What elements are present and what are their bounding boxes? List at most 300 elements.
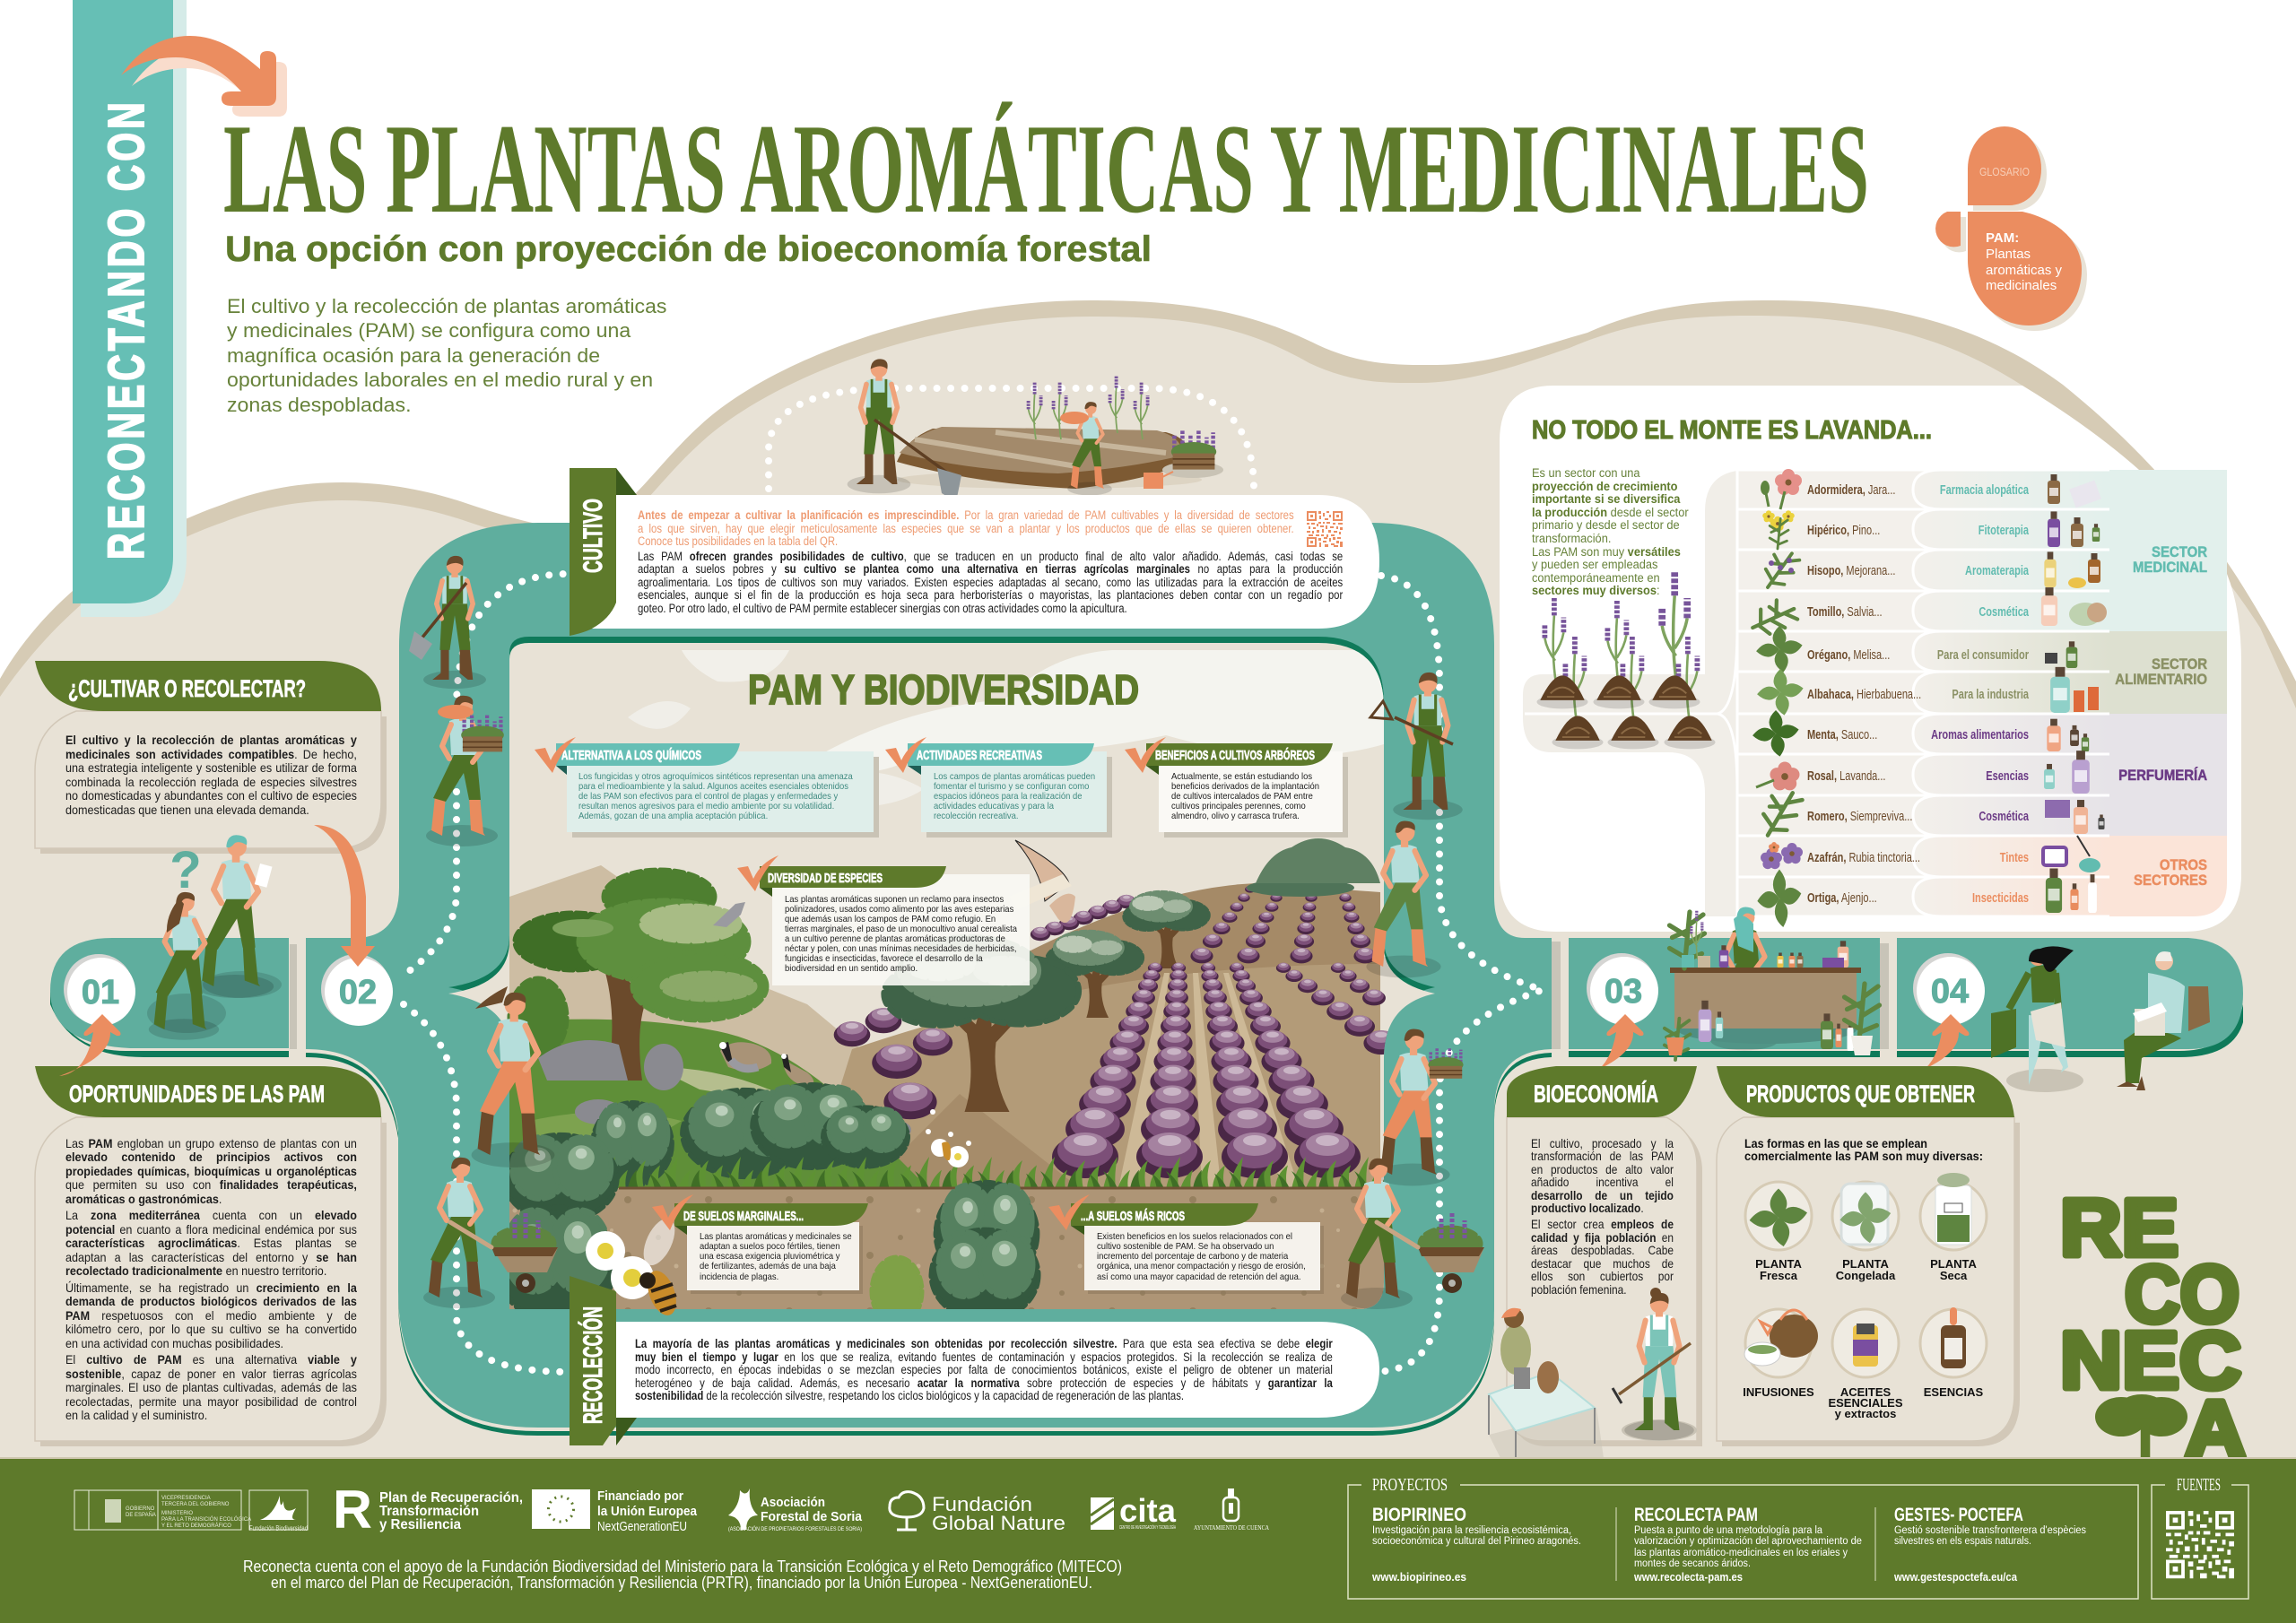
figure: woman standing, right	[1366, 821, 1441, 977]
text: alternativa a los químicos: Los fungicidas y otros agroquímicos sintéticos representan una amenaza	[578, 771, 852, 782]
glossary blobs: Plantas	[1986, 247, 2031, 262]
logo: reconecta: NEC	[2060, 1316, 2241, 1406]
card header: actividades recreativas	[885, 737, 1112, 838]
funding statement: Reconecta cuenta con el apoyo de la Fundación Biodiversidad del Ministerio para la Transición Ecológica y el Reto Demográfico (MITECO)	[243, 1558, 1122, 1575]
text: oportunidades de las PAM: marginales. El uso de plantas cultivadas, además de las	[65, 1380, 357, 1394]
text: oportunidades de las PAM: en una actividad con muchas posibilidades.	[65, 1336, 283, 1350]
text: alternativa a los químicos	[578, 771, 853, 821]
card header: diversidad de especies: DIVERSIDAD DE ESPECIES	[768, 871, 883, 886]
text: de suelos marginales	[700, 1230, 852, 1282]
text: no todo el monte intro: sectores muy diversos:	[1532, 584, 1660, 597]
arrow: to step 02	[314, 825, 375, 967]
card header: de suelos marginales	[652, 1194, 868, 1294]
text: cultivar o recolectar	[65, 733, 357, 817]
text: no todo el monte intro: Es un sector con una	[1532, 466, 1639, 480]
text: de suelos marginales: una escasa exigencia pluviométrica y	[700, 1251, 840, 1262]
project: recolecta pam: www.recolecta-pam.es	[1633, 1570, 1743, 1584]
panel: oportunidades de las PAM: OPORTUNIDADES DE LAS PAM	[69, 1081, 325, 1107]
step 04 marker	[1913, 953, 1985, 1025]
text: de suelos marginales: de fertilizantes, además de una baja	[700, 1261, 836, 1271]
text: actividades recreativas: recolección recreativa.	[934, 811, 1019, 821]
logo: gobierno de españa	[74, 1490, 251, 1530]
text: cultivo orange note: Antes de empezar a cultivar la planificación es imprescindible. Por la gran variedad de PAM cultivables y la diversidad de sectores	[638, 508, 1293, 522]
project: recolecta pam: Puesta a punto de una metodología para la	[1634, 1525, 1823, 1536]
products intro line 2: comercialmente las PAM son muy diversas:	[1744, 1149, 1983, 1163]
card header: alternativa a los químicos	[535, 737, 879, 838]
step 02 marker: 02	[339, 974, 377, 1011]
text: a suelos más ricos	[1097, 1230, 1306, 1282]
text: de suelos marginales: Las plantas aromáticas y medicinales se	[700, 1230, 852, 1241]
project: recolecta pam: montes de secanos áridos.	[1634, 1558, 1751, 1569]
text: recolección body: sostenibilidad de la recolección silvestre, respetando los ciclos biológicos y la capacidad de regeneración de las plantas.	[635, 1389, 1184, 1402]
product: infusiones: INFUSIONES	[1743, 1385, 1814, 1399]
arrow: to step 04	[1908, 1014, 1970, 1076]
figures on the route	[409, 556, 1484, 1309]
species names: Adormidera, Jara...	[1807, 482, 1895, 497]
funding statement: en el marco del Plan de Recuperación, Transformación y Resiliencia (PRTR), financiado por la Unión Europea - NextGenerationEU.	[271, 1574, 1092, 1592]
sector labels: PERFUMERÍA	[2118, 766, 2207, 784]
heading: no todo el monte: NO TODO EL MONTE ES LAVANDA...	[1532, 416, 1932, 445]
heading: PAM y biodiversidad: PAM Y BIODIVERSIDAD	[748, 666, 1139, 713]
project: biopirineo: BIOPIRINEO	[1372, 1505, 1466, 1525]
footer	[0, 1457, 2296, 1623]
text: actividades recreativas: actividades educativas y para la	[934, 801, 1054, 812]
step band 04	[1897, 938, 2243, 1057]
logo: fundación biodiversidad: Fundación Biodiversidad	[249, 1524, 308, 1532]
text: de suelos marginales: incidencia de plagas.	[700, 1271, 778, 1282]
step 03 marker: 03	[1605, 973, 1642, 1011]
logo: gobierno de españa: VICEPRESIDENCIA	[161, 1496, 211, 1501]
text: bioeconomía: productivo localizado.	[1531, 1201, 1644, 1215]
logo: unión europea: NextGenerationEU	[597, 1519, 687, 1534]
products intro: Las formas en las que se emplean	[1744, 1136, 1927, 1150]
text: alternativa a los químicos: para el medioambiente y la salud. Algunos aceites esenciales obtenidos	[578, 781, 848, 792]
arrow: to step 01	[59, 1014, 120, 1076]
use labels: Insecticidas	[1972, 890, 2029, 905]
text: a suelos más ricos: incremento del porcentaje de carbono y de materia	[1097, 1251, 1288, 1262]
project: gestes poctefa	[1893, 1505, 2086, 1584]
text: recolección body: modo incorrecto, en épocas indebidas o se mezclan especies por falta de conocimientos botánicos, existe el peligro de obtener un material	[635, 1363, 1332, 1376]
text: cultivar o recolectar: El cultivo y la recolección de plantas aromáticas y	[65, 733, 357, 747]
product: aceites esenciales: y extractos	[1835, 1407, 1896, 1420]
box: proyectos	[1348, 1475, 2138, 1599]
logo: asociación forestal de soria: Forestal de Soria	[761, 1509, 863, 1524]
figure: shopper woman	[1991, 946, 2083, 1092]
text: diversidad de especies: polinizadores, usados como alimento por las aves esteparias	[785, 904, 1013, 915]
step 04 marker: 04	[1931, 973, 1969, 1011]
species names: Orégano, Melisa...	[1807, 647, 1890, 662]
product icons	[2041, 474, 2107, 913]
panel: oportunidades de las PAM	[35, 1066, 387, 1446]
text: bioeconomía: en productos de alto valor	[1531, 1162, 1674, 1176]
text: cultivo orange note	[638, 508, 1293, 548]
text: cultivo body: goteo. Por otro lado, el cultivo de PAM permite establecer sinergias con otras actividades como la apicultura.	[638, 602, 1126, 615]
logo: cita: CENTRO DE INVESTIGACIÓN Y TECNOLOGÍA	[1119, 1524, 1176, 1531]
product: aceites esenciales	[1828, 1309, 1903, 1420]
figure: woman with crate, right	[1375, 1029, 1464, 1185]
text: no todo el monte intro	[1532, 466, 1689, 597]
text: cultivo orange note: a los que sirven, hay que elegir meticulosamente las especies que se van a plantar y los productos que de ellas se quieren obtener.	[638, 522, 1293, 535]
logo: gobierno de españa: Y EL RETO DEMOGRÁFICO	[161, 1523, 231, 1529]
text: beneficios a cultivos arbóreos	[1171, 771, 1319, 821]
lavender bed	[1537, 570, 1715, 749]
intro paragraph: zonas despobladas.	[227, 394, 411, 416]
step band 03	[1552, 938, 1889, 1057]
card header: diversidad de especies	[737, 855, 1030, 985]
text: beneficios a cultivos arbóreos: beneficios derivados de la implantación	[1171, 781, 1319, 792]
text: oportunidades de las PAM: elevado contenido de principios activos con	[65, 1150, 357, 1164]
project: gestes poctefa: Gestió sostenible transfronterera d'espècies	[1894, 1525, 2086, 1536]
text: a suelos más ricos: cultivo sostenible de PAM. Se ha observado un	[1097, 1241, 1274, 1252]
sector labels: OTROS	[2160, 857, 2207, 873]
text: no todo el monte intro: proyección de crecimiento	[1532, 480, 1678, 493]
icon: falcon	[1009, 840, 1075, 923]
logo: unión europea: Financiado por	[597, 1488, 683, 1504]
figure: couple near step 01: ?	[170, 841, 202, 899]
project: gestes poctefa: www.gestespoctefa.eu/ca	[1893, 1570, 2018, 1584]
text: oportunidades de las PAM: sostenible, capaz de poner en valor tierras agrícolas	[65, 1367, 357, 1381]
glossary blobs: PAM:	[1986, 230, 2019, 246]
logo: asociación forestal de soria: (ASOCIACIÓN DE PROPIETARIOS FORESTALES DE SORIA)	[728, 1526, 862, 1532]
arrow: into title	[121, 36, 287, 117]
text: no todo el monte intro: y pueden ser empleadas	[1532, 558, 1657, 571]
project: biopirineo: Investigación para la resiliencia ecosistémica,	[1372, 1525, 1571, 1536]
text: oportunidades de las PAM: adaptan a las características del entorno y se han	[65, 1250, 357, 1264]
step 02 marker	[321, 954, 393, 1026]
box: fuentes: FUENTES	[2177, 1475, 2221, 1495]
text: oportunidades de las PAM: potencial en cuanto a flora medicinal endémica por sus	[65, 1221, 357, 1236]
diagram: trunk from lavender to species	[1523, 470, 1758, 916]
panel: productos que obtener	[1717, 1066, 2020, 1446]
product: planta seca	[1920, 1173, 1987, 1282]
text: bioeconomía	[1531, 1135, 1674, 1297]
card header: alternativa a los químicos: ALTERNATIVA A LOS QUÍMICOS	[561, 748, 701, 763]
logo: asociación forestal de soria: Asociación	[761, 1495, 825, 1510]
product: infusiones	[1743, 1309, 1818, 1399]
text: recolección body: heterogéneo y de baja calidad. Además, es necesario acatar la normativa sobre protección de especies y de hábitats y garantizar la	[635, 1376, 1332, 1390]
logo: cita: cita	[1119, 1492, 1177, 1529]
logo: reconecta: RE	[2060, 1184, 2179, 1273]
sector labels: SECTOR	[2152, 544, 2207, 560]
product: planta congelada: PLANTA	[1842, 1257, 1889, 1271]
teal route band	[306, 523, 1552, 1436]
text: actividades recreativas: espacios idóneos para la realización de	[934, 791, 1082, 802]
use labels: Para el consumidor	[1937, 647, 2029, 662]
use labels: Esencias	[1986, 768, 2029, 783]
text: cultivo body: adaptan a suelos pobres y su cultivo se plantea como una alternativa en tierras agrícolas marginales no aptas para la producción	[638, 562, 1343, 576]
text: oportunidades de las PAM: demanda de productos biológicos derivados de las	[65, 1294, 357, 1308]
text: diversidad de especies: Las plantas aromáticas suponen un reclamo para insectos	[785, 893, 1004, 904]
text: oportunidades de las PAM: en la calidad y el suministro.	[65, 1408, 207, 1422]
card header: beneficios a cultivos arbóreos: BENEFICIOS A CULTIVOS ARBÓREOS	[1155, 747, 1315, 763]
text: oportunidades de las PAM: recolectado tradicionalmente en nuestro territorio.	[65, 1263, 326, 1278]
panel: recolección text box	[592, 1322, 1379, 1418]
sector labels: ALIMENTARIO	[2115, 672, 2207, 688]
intro paragraph: oportunidades laborales en el medio rural y en	[227, 369, 653, 391]
text: oportunidades de las PAM: La zona mediterránea cuenta con un elevado	[65, 1208, 357, 1222]
text: recolección body: muy bien el tiempo y lugar en los que se realiza, evitando fuentes de contaminación y espacios protegidos. Si la recolección se realiza de	[635, 1350, 1332, 1363]
box: proyectos: PROYECTOS	[1372, 1475, 1448, 1495]
text: a suelos más ricos: así como una mayor capacidad de retención del agua.	[1097, 1271, 1300, 1282]
box: fuentes	[2152, 1475, 2248, 1599]
logo: unión europea	[532, 1488, 698, 1534]
panel: no todo el monte es lavanda	[1500, 386, 2241, 932]
logo: plan de recuperación: Transformación	[379, 1504, 479, 1519]
figure: woman with hoe	[1613, 1288, 1697, 1441]
logo: reconecta	[2060, 1184, 2246, 1475]
sector backgrounds	[2054, 470, 2227, 916]
product: planta congelada	[1832, 1182, 1899, 1282]
text: cultivo body	[638, 549, 1344, 615]
text: no todo el monte intro: contemporáneamente en	[1532, 571, 1660, 585]
figure: man with shovel, left	[409, 556, 486, 689]
text: a suelos más ricos: Existen beneficios en los suelos relacionados con el	[1097, 1230, 1292, 1241]
logo: fundación global nature: Fundación	[932, 1493, 1032, 1515]
use labels: Cosmética	[1979, 808, 2030, 823]
text: cultivo orange note: Conoce tus posibilidades en la tabla del QR.	[638, 534, 838, 548]
text: diversidad de especies: néctar y polen, con unas mínimas necesidades de herbicidas,	[785, 943, 1016, 954]
text: actividades recreativas: fomentar el turismo y se configuran como	[934, 781, 1089, 792]
logo: gobierno de españa: PARA LA TRANSICIÓN ECOLÓGICA	[161, 1516, 251, 1523]
logo: plan de recuperación: R	[333, 1480, 372, 1540]
icon: daisies and bee	[586, 1214, 682, 1319]
step band 01	[50, 938, 297, 1057]
funding statement	[243, 1558, 1122, 1592]
product: planta seca: PLANTA	[1930, 1257, 1977, 1271]
figure: woman carrying crate, left	[426, 696, 504, 846]
panel: bioeconomía: BIOECONOMÍA	[1534, 1080, 1658, 1107]
text: beneficios a cultivos arbóreos: almendro, olivo y carrasca trufera.	[1171, 811, 1300, 821]
glossary blobs	[1935, 126, 2087, 331]
logo: fundación global nature	[890, 1492, 1065, 1534]
subtitle: Una opción con proyección de bioeconomía forestal	[225, 230, 1152, 269]
text: no todo el monte intro: importante si se diversifica	[1532, 492, 1680, 506]
logo: unión europea: la Unión Europea	[597, 1504, 698, 1519]
glossary blobs: aromáticas y	[1986, 263, 2063, 278]
side banner: reconectando con: RECONECTANDO CON	[97, 102, 155, 560]
species names: Romero, Siempreviva...	[1807, 808, 1912, 823]
project: recolecta pam	[1633, 1505, 1862, 1584]
text: oportunidades de las PAM: Últimamente, se ha registrado un crecimiento en la	[65, 1280, 357, 1295]
text: cultivar o recolectar: domesticadas que tienen una elevada demanda.	[65, 802, 309, 816]
top scene: field preparation	[848, 359, 1223, 502]
product: planta seca: Seca	[1940, 1269, 1968, 1282]
logo: fundación global nature: Global Nature	[932, 1512, 1065, 1534]
ribbon: cultivo: CULTIVO	[578, 499, 608, 573]
dotted routes	[403, 388, 1543, 1372]
shop counter scene	[1665, 907, 1880, 1060]
text: oportunidades de las PAM: PAM respetuosos con el medio ambiente y de	[65, 1307, 357, 1322]
side banner: reconectando con	[73, 0, 187, 617]
species names: Azafrán, Rubia tinctoria...	[1807, 849, 1920, 864]
logo: gobierno de españa: MINISTERIO	[161, 1511, 193, 1516]
text: actividades recreativas: Los campos de plantas aromáticas pueden	[934, 771, 1095, 782]
text: recolección body: La mayoría de las plantas aromáticas y medicinales son obtenidas por recolección silvestre. Para que esta sea efectiva se debe elegir	[635, 1337, 1332, 1350]
logo: plan de recuperación: Plan de Recuperación,	[379, 1490, 523, 1506]
biodiversity illustration	[497, 650, 1399, 1325]
product: esencias: ESENCIAS	[1924, 1385, 1984, 1399]
text: oportunidades de las PAM: que permiten su uso con finalidades terapéuticas,	[65, 1177, 357, 1192]
text: bioeconomía: calidad y fija población en	[1531, 1230, 1674, 1245]
card header: de suelos marginales: DE SUELOS MARGINALES...	[683, 1209, 804, 1224]
logo: reconecta: T	[2127, 1405, 2163, 1471]
use rows	[1913, 470, 2109, 916]
panel: cultivar o recolectar	[35, 661, 387, 854]
intro paragraph: El cultivo y la recolección de plantas aromáticas	[227, 295, 666, 317]
project: recolecta pam: las plantas aromático-medicinales en los eriales y	[1634, 1548, 1848, 1558]
species icons	[1747, 469, 1805, 929]
use labels	[1931, 482, 2030, 905]
product: planta congelada: Congelada	[1836, 1269, 1896, 1282]
species names: Menta, Sauco...	[1807, 726, 1877, 742]
text: beneficios a cultivos arbóreos: de cultivos intercalados de PAM entre	[1171, 791, 1313, 802]
logo: cita	[1091, 1492, 1177, 1531]
panel: bioeconomía	[1507, 1066, 1702, 1446]
species rows	[1737, 470, 2006, 916]
figure: man with shovel and phone, right	[1370, 673, 1463, 820]
card header: a suelos más ricos: ...A SUELOS MÁS RICOS	[1081, 1209, 1185, 1224]
figure: woman at distillation table	[1489, 1308, 1605, 1471]
text: bioeconomía: áreas despobladas. Cabe	[1531, 1243, 1674, 1257]
text: bioeconomía: ellos son cubiertos por	[1531, 1269, 1674, 1283]
text: bioeconomía: El cultivo, procesado y la	[1531, 1135, 1674, 1150]
product: planta fresca: PLANTA	[1755, 1257, 1802, 1271]
text: oportunidades de las PAM: recolectadas, permite una mayor posibilidad de control	[65, 1393, 357, 1408]
text: diversidad de especies: que además usan los campos de PAM como refugio. En	[785, 914, 996, 924]
project: recolecta pam: RECOLECTA PAM	[1634, 1505, 1758, 1525]
logo: plan de recuperación	[333, 1480, 523, 1540]
species names: Rosal, Lavanda...	[1807, 768, 1885, 783]
sector labels	[2115, 544, 2207, 889]
text: beneficios a cultivos arbóreos: cultivos principales perennes, como	[1171, 801, 1306, 812]
logo: gobierno de españa: GOBIERNO	[126, 1506, 155, 1512]
card header: actividades recreativas: ACTIVIDADES RECREATIVAS	[917, 748, 1042, 763]
use labels: Fitoterapia	[1979, 522, 2030, 537]
use labels: Farmacia alopática	[1940, 482, 2030, 497]
arrow: to step 03	[1582, 1014, 1643, 1076]
text: a suelos más ricos: orgánica, una menor compactación y riesgo de erosión,	[1097, 1261, 1306, 1271]
product: planta fresca: Fresca	[1760, 1269, 1798, 1282]
text: actividades recreativas	[934, 771, 1095, 821]
product: aceites esenciales: ACEITES	[1840, 1385, 1891, 1399]
sector labels: MEDICINAL	[2133, 560, 2207, 576]
intro paragraph: y medicinales (PAM) se configura como una	[227, 319, 631, 342]
QR code: cultivo	[1307, 511, 1343, 547]
logo: gobierno de españa: TERCERA DEL GOBIERNO	[161, 1502, 230, 1507]
logo: ayuntamiento de cuenca	[1194, 1488, 1269, 1532]
glossary blobs: medicinales	[1986, 278, 2057, 293]
text: no todo el monte intro: Las PAM son muy versátiles	[1532, 545, 1681, 559]
text: diversidad de especies	[785, 893, 1017, 974]
text: diversidad de especies: biodiversidad en un sentido amplio.	[785, 963, 918, 974]
step 01 marker: 01	[82, 974, 119, 1011]
text: bioeconomía: desarrollo de un tejido	[1531, 1188, 1674, 1202]
logo: gobierno de españa: DE ESPAÑA	[126, 1512, 156, 1518]
text: oportunidades de las PAM: propiedades químicas, bioquímicas u organolépticas	[65, 1164, 357, 1178]
ribbon: cultivo	[570, 468, 637, 636]
figure: man with wheelbarrow, left	[423, 1158, 558, 1308]
text: cultivo body: agroalimentaria. Los tipos de cultivos son muy variados. Existen especies adaptadas al secano, como las utilizadas para la extracción de aceites	[638, 576, 1343, 589]
text: no todo el monte intro: la producción desde el sector	[1532, 506, 1689, 519]
product: planta fresca	[1745, 1182, 1812, 1282]
logo: asociación forestal de soria	[728, 1488, 863, 1532]
card header: a suelos más ricos	[1048, 1194, 1324, 1294]
text: cultivo body: esenciales, aunque si el fin de la producción es hoja seca para herboristerías o mayoristas, las plantaciones deben contar con un regadío por	[638, 588, 1343, 602]
project: biopirineo	[1371, 1505, 1581, 1584]
ribbon: recolección: RECOLECCIÓN	[578, 1306, 608, 1424]
step 01 marker	[64, 954, 135, 1026]
text: bioeconomía: población femenina.	[1531, 1282, 1627, 1297]
product: esencias	[1920, 1307, 1987, 1399]
text: diversidad de especies: fungicidas e insecticidas, favorece el desarrollo de la	[785, 953, 983, 964]
project: gestes poctefa: GESTES- POCTEFA	[1894, 1505, 2023, 1525]
panel: productos que obtener: PRODUCTOS QUE OBTENER	[1746, 1081, 1975, 1107]
text: bioeconomía: transformación de las PAM	[1531, 1149, 1674, 1163]
text: cultivar o recolectar: no domesticadas y abundantes con el cultivo de especies	[65, 788, 357, 803]
use labels: Aromas alimentarios	[1931, 726, 2029, 742]
species names: Tomillo, Salvia...	[1807, 603, 1883, 619]
text: oportunidades de las PAM	[65, 1135, 357, 1422]
figure: seated man with box	[2117, 951, 2210, 1090]
species names: Albahaca, Hierbabuena...	[1807, 686, 1921, 701]
text: oportunidades de las PAM: El cultivo de PAM es una alternativa viable y	[65, 1352, 357, 1367]
panel: cultivo text box	[592, 495, 1379, 629]
step 03 marker	[1587, 953, 1658, 1025]
text: bioeconomía: destacar que muchos de	[1531, 1256, 1674, 1271]
glossary blobs: GLOSARIO	[1979, 165, 2030, 178]
species names: Hipérico, Pino...	[1807, 522, 1880, 537]
text: diversidad de especies: a un cultivo perenne de plantas aromáticas productoras de	[785, 933, 1005, 944]
sector labels: SECTOR	[2152, 656, 2207, 673]
use labels: Para la industria	[1952, 686, 2030, 701]
text: alternativa a los químicos: Además, gozan de una amplia aceptación pública.	[578, 811, 768, 821]
intro paragraph	[227, 295, 666, 416]
logo: plan de recuperación: y Resiliencia	[379, 1517, 461, 1532]
text: de suelos marginales: adaptan a suelos poco fértiles, tienen	[700, 1241, 840, 1252]
product: aceites esenciales: ESENCIALES	[1828, 1396, 1903, 1410]
panel: cultivar o recolectar: ¿CULTIVAR O RECOLECTAR?	[68, 675, 306, 702]
project: recolecta pam: valorización y optimización del aprovechamiento de	[1634, 1536, 1862, 1547]
species names: Hisopo, Mejorana...	[1807, 562, 1895, 577]
logo: ayuntamiento de cuenca: AYUNTAMIENTO DE CUENCA	[1194, 1524, 1269, 1532]
project: gestes poctefa: silvestres en els espais naturals.	[1894, 1536, 2031, 1547]
text: bioeconomía: El sector crea empleos de	[1531, 1217, 1674, 1231]
text: no todo el monte intro: primario y desde el sector de	[1532, 518, 1680, 532]
text: diversidad de especies: tierras marginales, el paso de un monocultivo anual cerealista	[785, 924, 1017, 934]
text: beneficios a cultivos arbóreos: Actualmente, se están estudiando los	[1171, 771, 1312, 782]
figure: man with wheelbarrow, right	[1341, 1159, 1484, 1309]
logo: reconecta: CO	[2125, 1250, 2239, 1340]
use labels: Tintes	[2000, 849, 2029, 864]
figure: couple near step 01	[147, 835, 282, 1040]
panel: PAM y biodiversidad	[448, 637, 1435, 1325]
logo: fundación biodiversidad	[249, 1490, 308, 1532]
text: alternativa a los químicos: de las PAM son efectivos para el control de plagas y enfermedades y	[578, 791, 838, 802]
species names	[1807, 482, 1921, 905]
text: cultivar o recolectar: una estrategia inteligente y sostenible es utilizar de forma	[65, 760, 357, 775]
figure: woman gathering plants	[472, 986, 554, 1167]
text: oportunidades de las PAM: Las PAM engloban un grupo extenso de plantas con un	[65, 1135, 357, 1150]
sector labels: SECTORES	[2134, 872, 2207, 889]
use labels: Aromaterapia	[1965, 562, 2030, 577]
text: alternativa a los químicos: resultan menos agresivos para el medio ambiente por su volatilidad.	[578, 801, 834, 812]
text: bioeconomía: añadido incentiva el	[1531, 1175, 1674, 1189]
text: oportunidades de las PAM: kilómetro cero, por lo que su cultivo se ha convertido	[65, 1322, 357, 1336]
species names: Ortiga, Ajenjo...	[1807, 890, 1877, 905]
text: cultivar o recolectar: medicinales son actividades compatibles. De hecho,	[65, 746, 357, 760]
text: no todo el monte intro: transformación.	[1532, 532, 1611, 545]
project: biopirineo: socioeconómica y cultural del Pirineo aragonés.	[1372, 1536, 1581, 1547]
